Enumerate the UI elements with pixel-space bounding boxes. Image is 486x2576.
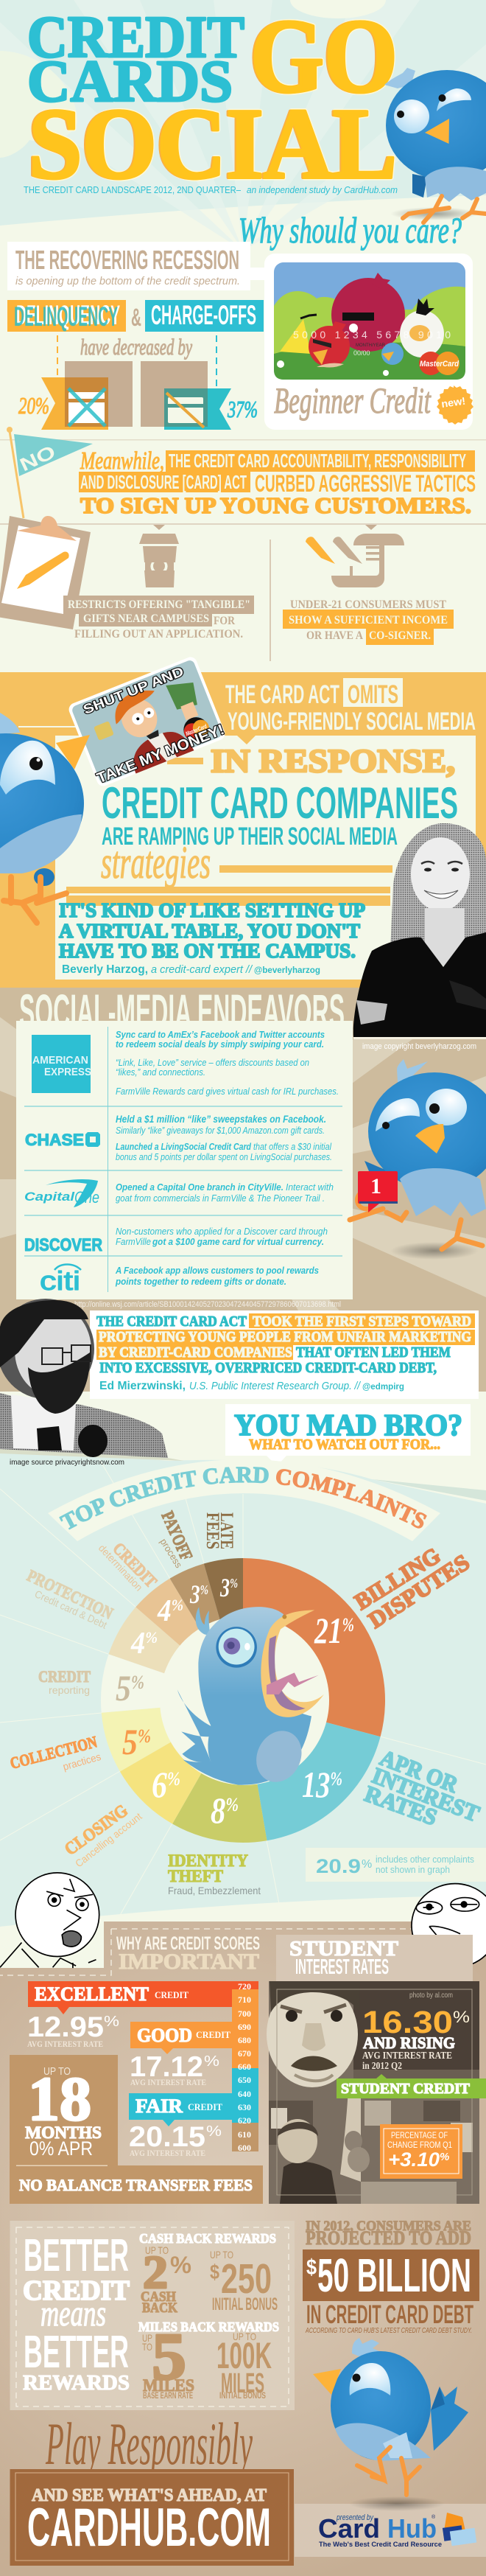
heading: why are credit scores important: WHY ARE CREDIT SCORES — [116, 1933, 260, 1954]
panel: cardhub call to action: AND SEE WHAT'S AHEAD, AT — [32, 2486, 267, 2505]
quote: beverly harzog: IT'S KIND OF LIKE SETTING UP — [59, 899, 365, 921]
label: delinquency: DELINQUENCY — [14, 301, 118, 332]
icon: blue bird with notification — [350, 1059, 486, 1260]
percent values: 6 — [152, 1764, 170, 1805]
title — [27, 0, 398, 200]
text: citi: A Facebook app allows customers to pool rewards — [115, 1265, 319, 1276]
block: fair credit — [129, 2093, 232, 2158]
divider with arrows — [0, 523, 486, 661]
card illustration: 00/00 — [353, 349, 370, 357]
chart: credit score scale: 690 — [238, 2022, 251, 2032]
subtitle: THE CREDIT CARD LANDSCAPE 2012, 2ND QUARTER– — [24, 184, 242, 195]
label: billing disputes: DISPUTES — [364, 1549, 474, 1633]
chart: credit score scale — [232, 1981, 258, 2153]
panel: 50 billion debt: $ — [306, 2255, 317, 2280]
text block: card act intro: AND DISCLOSURE [CARD] ACT — [80, 471, 247, 493]
header background with sky rays and clouds — [0, 0, 486, 251]
panel: student interest rates heading: INTEREST RATES — [295, 1955, 389, 1979]
percent values: 4 — [158, 1594, 173, 1628]
text: amex: “Link, Like, Love” service – offers discounts based on — [116, 1057, 309, 1068]
panel: Ed Mierzwinski quote: INTO EXCESSIVE, OVERPRICED CREDIT-CARD DEBT, — [99, 1360, 437, 1376]
stat: 16.30 percent — [362, 2005, 470, 2072]
miles back rewards: INITIAL BONUS — [219, 2390, 266, 2401]
text block: tangible gifts: FOR — [214, 615, 235, 627]
panel: student interest rates heading — [276, 1935, 473, 1981]
label: late fees — [202, 1512, 236, 1549]
have decreased by chart — [18, 334, 258, 430]
percent values: 3 — [220, 1573, 233, 1602]
text: amex: FarmVille Rewards card gives virtual cash for IRL purchases. — [116, 1086, 339, 1097]
divider — [0, 439, 486, 441]
text: photo credit: photo by al.com — [409, 1992, 453, 2000]
percent values: % — [225, 1794, 239, 1815]
label: credit reporting: CREDIT — [38, 1667, 91, 1686]
text block: tangible gifts: GIFTS NEAR CAMPUSES — [83, 612, 209, 625]
meme: y u no guy — [0, 1873, 99, 1968]
cash back rewards: $ — [210, 2261, 219, 2283]
icon: screaming twitter bird — [177, 1607, 324, 1790]
miles back rewards: UP TO — [233, 2331, 256, 2342]
block: fair credit: 20.15 — [129, 2121, 205, 2153]
cash back rewards: UP TO — [210, 2249, 233, 2261]
text: chase: Similarly “like” giveaways for $1,000 Amazon.com gift cards. — [116, 1125, 325, 1136]
chart: credit score scale: 680 — [238, 2035, 251, 2045]
panel: better credit means better rewards — [10, 2221, 295, 2410]
block: fair credit: AVG INTEREST RATE — [130, 2148, 205, 2158]
title: SOCIAL — [29, 88, 397, 200]
panel: presented by card hub — [295, 2504, 486, 2557]
cash back rewards: UP TO — [145, 2244, 169, 2256]
source url: http://online.wsj.com/article/SB10001424052702304724404577297860607013698.html — [74, 1300, 341, 1309]
stat: 16.30 percent: % — [453, 2008, 470, 2026]
heading: in response: IN RESPONSE, — [211, 743, 455, 779]
slogan — [23, 2230, 130, 2395]
slogan: BETTER — [24, 2230, 129, 2281]
subtitle: an independent study by CardHub.com — [247, 184, 398, 195]
panel: 50 billion debt — [303, 2219, 479, 2335]
pie ray lines — [0, 1459, 486, 1916]
note: 20.9 percent: not shown in graph — [376, 1864, 450, 1875]
callout: percentage of change: +3.10 — [388, 2149, 440, 2171]
photo: student angry face — [267, 1981, 479, 2204]
callout: percentage of change: PERCENTAGE OF — [391, 2130, 448, 2140]
label: student credit: STUDENT CREDIT — [341, 2081, 471, 2097]
block: excellent credit: % — [104, 2014, 119, 2030]
block: excellent credit — [27, 1981, 232, 2049]
chart: credit score scale: 670 — [238, 2048, 251, 2059]
panel: 18 months 0% apr: NO BALANCE TRANSFER FEES — [19, 2176, 253, 2194]
percent values: % — [138, 1725, 151, 1747]
miles back rewards: BASE EARN RATE — [143, 2390, 193, 2401]
text: discover — [116, 1226, 328, 1247]
stat: 16.30 percent: AND RISING — [363, 2034, 455, 2052]
percent values: % — [230, 1576, 238, 1591]
heading: card act omits: THE CARD ACT — [225, 680, 339, 709]
block: excellent credit: EXCELLENT — [35, 1983, 149, 2005]
text: citi: points together to redeem gifts or donate. — [115, 1276, 286, 1287]
label: identity theft: IDENTITY — [168, 1851, 248, 1870]
label: payoff process: PAYOFF — [158, 1509, 196, 1563]
icon: coffee cup — [139, 534, 179, 587]
band: social-media endeavors background with rays — [0, 988, 486, 1392]
cash back rewards: % — [170, 2252, 191, 2278]
logo: american express: AMERICAN — [32, 1054, 88, 1067]
panel: 18 months 0% apr: MONTHS — [25, 2123, 102, 2142]
label: late fees: LATE — [216, 1512, 236, 1549]
quote: beverly harzog: Beverly Harzog, — [62, 963, 148, 976]
heading: why are credit scores important — [116, 1933, 260, 1974]
crowd — [269, 2086, 473, 2204]
text: discover: got a $100 game card for virtual currency. — [152, 1236, 324, 1247]
callout: you mad bro — [225, 1404, 471, 1466]
percent values: 13 — [302, 1764, 339, 1805]
stat: 16.30 percent: AVG INTEREST RATE — [362, 2050, 452, 2062]
chart: credit score scale: 610 — [238, 2129, 251, 2140]
meme: challenge accepted guy — [412, 1884, 486, 1981]
panel: Ed Mierzwinski quote: Ed Mierzwinski, — [99, 1380, 186, 1392]
text: discover: FarmVille — [116, 1236, 151, 1247]
logo: american express: EXPRESS — [44, 1066, 91, 1078]
heading: card act omits: OMITS — [348, 680, 398, 709]
text: chase: Held a $1 million “like” sweepstakes on Facebook. — [116, 1113, 326, 1125]
label: protection: Credit card & Debt — [33, 1588, 109, 1631]
miles back rewards: 100K — [216, 2335, 272, 2376]
miles back rewards: MILES — [143, 2376, 194, 2395]
quote: beverly harzog: @beverlyharzog — [254, 965, 320, 975]
icon: NO flag: NO — [17, 441, 59, 475]
chart labels — [8, 1509, 483, 1896]
cash back rewards: INITIAL BONUS — [212, 2294, 278, 2314]
cash back rewards: CASH — [141, 2289, 176, 2305]
text: amex — [116, 1029, 339, 1097]
panel: presented by card hub: Hub — [387, 2513, 437, 2544]
icon: cards — [443, 2513, 476, 2546]
card illustration — [274, 262, 465, 380]
label: charge-offs — [145, 300, 264, 332]
cash back rewards: CASH BACK REWARDS — [139, 2231, 276, 2246]
text: chase: bonus and 5 points per dollar spent on LivingSocial purchases. — [116, 1152, 332, 1162]
label: closing: Cancelling account — [73, 1810, 144, 1869]
panel: recovering recession: THE RECOVERING RECESSION — [15, 245, 239, 275]
heading: why are credit scores important: IMPORTANT — [119, 1950, 259, 1974]
percent values: % — [131, 1672, 144, 1693]
quote: beverly harzog: a credit-card expert // — [151, 963, 253, 976]
title: SOCIAL — [29, 88, 397, 200]
block: excellent credit: 12.95 — [27, 2011, 104, 2043]
have decreased by chart: 37% — [227, 396, 258, 422]
label: identity theft — [168, 1851, 261, 1896]
percent values: % — [200, 1582, 208, 1597]
chart: credit score scale: 710 — [238, 1994, 251, 2005]
heading: card act omits — [225, 678, 476, 736]
text: capital one: Interact with — [286, 1181, 334, 1193]
image: take my money card — [67, 655, 227, 788]
slogan: means — [40, 2292, 106, 2334]
text: capital one — [116, 1181, 334, 1204]
quote: beverly harzog: HAVE TO BE ON THE CAMPUS. — [59, 940, 356, 962]
block: good credit: CREDIT — [196, 2029, 230, 2040]
note: 20.9 percent: includes other complaints — [376, 1854, 474, 1865]
badge: new — [437, 385, 473, 425]
icon: clipboard with pencil — [0, 516, 91, 629]
icon: header blue bird — [384, 68, 486, 223]
panel: presented by card hub: The Web's Best Credit Card Resource — [319, 2541, 442, 2549]
text block: card act intro — [79, 447, 476, 518]
panel: angry birds beginner credit card — [264, 254, 473, 430]
text: capital one: Opened a Capital One branch in CityVille. — [116, 1181, 284, 1193]
block: good credit: % — [204, 2053, 219, 2070]
label: protection: PROTECTION — [24, 1566, 116, 1623]
icon: NO flag — [7, 427, 93, 518]
logo: capital one — [24, 1179, 99, 1207]
title: GO — [249, 0, 396, 114]
panel: student interest rates heading: STUDENT — [289, 1938, 398, 1961]
panel: recovering recession: is opening up the bottom of the credit spectrum. — [15, 275, 240, 287]
panel: cardhub call to action: CARDHUB.COM — [27, 2498, 271, 2558]
title: CREDIT — [27, 5, 244, 70]
label: delinquency — [7, 300, 126, 332]
callout: percentage of change — [380, 2124, 462, 2179]
text: chase: Launched a LivingSocial Credit Card — [116, 1142, 251, 1152]
panel: 50 billion debt: IN 2012, CONSUMERS ARE — [306, 2219, 471, 2234]
label: charge-offs: CHARGE-OFFS — [151, 300, 256, 330]
block: fair credit: CREDIT — [188, 2101, 222, 2112]
percent values: 5 — [116, 1667, 134, 1708]
miles back rewards: MILES BACK REWARDS — [138, 2320, 279, 2334]
cash back rewards: BACK — [142, 2300, 177, 2316]
logo: discover: DISCOVER — [24, 1235, 102, 1255]
block: good credit: GOOD — [137, 2025, 192, 2046]
percent values: % — [172, 1596, 183, 1614]
panel: Ed Mierzwinski quote: THAT OFTEN LED THEM — [296, 1344, 451, 1361]
icon: blue bird with notification: 1 — [370, 1174, 381, 1198]
pie section background teal — [0, 1392, 486, 1927]
cash back rewards: 250 — [221, 2255, 272, 2303]
label: credit reporting: reporting — [49, 1684, 90, 1696]
note: 20.9 percent: % — [362, 1858, 372, 1871]
panel: Ed Mierzwinski quote: @edmpirg — [362, 1381, 404, 1392]
label: late fees: FEES — [202, 1512, 222, 1549]
slogan: REWARDS — [23, 2371, 130, 2395]
percent values: 5 — [122, 1721, 141, 1762]
percent values: % — [330, 1768, 342, 1790]
label: collection: practices — [61, 1751, 102, 1773]
miles back rewards: UP — [142, 2332, 152, 2344]
panel: recovering recession — [7, 242, 265, 290]
panel: cardhub call to action — [10, 2469, 294, 2566]
label: credit reporting — [38, 1667, 91, 1696]
percent values: % — [145, 1628, 158, 1647]
photo: beverly harzog — [353, 823, 486, 1039]
panel: 18 months 0% apr: UP TO — [43, 2065, 71, 2078]
text block: tangible gifts: FILLING OUT AN APPLICATION. — [74, 628, 243, 640]
percent values: % — [342, 1614, 354, 1636]
title: GO — [250, 0, 398, 114]
lower section tan background — [0, 1921, 486, 2576]
note: 20.9 percent — [306, 1848, 486, 1882]
callout: you mad bro: YOU MAD BRO? — [234, 1408, 462, 1442]
icon: left blue bird — [0, 713, 90, 923]
panel: 18 months 0% apr: 0% APR — [29, 2137, 93, 2160]
text block: card act intro: Meanwhile, — [80, 447, 164, 475]
title: CARDS — [27, 49, 233, 114]
title: SOCIAL — [27, 88, 395, 200]
text block: under-21 consumers: CO-SIGNER. — [369, 629, 431, 642]
panel: Ed Mierzwinski quote: U.S. Public Interest Research Group. // — [189, 1380, 362, 1392]
block: excellent credit: AVG INTEREST RATE — [27, 2039, 103, 2049]
miles back rewards: MILES — [221, 2368, 264, 2399]
label: identity theft: Fraud, Embezzlement — [168, 1885, 261, 1896]
have decreased by chart: 20% — [18, 392, 49, 419]
text block: under-21 consumers: SHOW A SUFFICIENT INCOME — [289, 614, 448, 626]
chart: credit score scale: 630 — [238, 2102, 251, 2112]
caption: image source: image source privacyrightsnow.com — [10, 1458, 124, 1467]
badge: new: new! — [440, 395, 466, 410]
callout: you mad bro: WHAT TO WATCH OUT FOR... — [249, 1437, 440, 1453]
heading: in response — [66, 743, 458, 906]
slogan: CREDIT — [23, 2275, 130, 2306]
band: orange social media section — [0, 672, 486, 988]
text block: under-21 consumers — [283, 598, 454, 645]
panel: endeavors table — [16, 1021, 353, 1299]
cash back rewards: 2 — [143, 2246, 168, 2298]
percent values: 4 — [131, 1627, 147, 1661]
text: citi — [115, 1265, 319, 1287]
percent values: 8 — [211, 1790, 229, 1831]
text block: card act intro: TO SIGN UP YOUNG CUSTOMERS. — [80, 492, 471, 518]
panel: 18 months 0% apr: 18 — [28, 2064, 91, 2134]
text: Play Responsibly — [46, 2410, 253, 2477]
percent values: % — [167, 1768, 180, 1790]
image: take my money card: SHUT UP AND — [81, 664, 186, 717]
label: apr or interest rates: RATES — [362, 1781, 440, 1830]
stat: 16.30 percent: in 2012 Q2 — [362, 2061, 402, 2072]
logo: chase: CHASE — [25, 1131, 84, 1149]
subtitle — [24, 184, 398, 195]
label: delinquency: DELINQUENCY — [16, 300, 120, 330]
label: apr or interest rates: INTEREST — [368, 1762, 483, 1826]
banner: top credit card complaints: TOP CREDIT CARD COMPLAINTS — [59, 1467, 427, 1530]
block: excellent credit: CREDIT — [155, 1989, 189, 2000]
logo: capital one: Capital — [24, 1190, 76, 1204]
block: good credit: AVG INTEREST RATE — [130, 2077, 206, 2087]
text block: tangible gifts — [63, 596, 254, 640]
quote: beverly harzog — [59, 899, 365, 976]
logo: american express — [32, 1035, 91, 1093]
label: collection: COLLECTION — [8, 1732, 99, 1773]
card illustration: MONTH/YEAR — [356, 343, 386, 348]
chart: complaints donut — [101, 1558, 385, 1843]
percent values — [116, 1573, 354, 1831]
chart: credit score scale: 650 — [238, 2075, 251, 2085]
label: payoff process: process — [158, 1537, 185, 1570]
label: identity theft: THEFT — [168, 1867, 223, 1885]
have decreased by chart: have decreased by — [80, 334, 192, 360]
image: take my money card: MasterCard — [185, 723, 208, 737]
panel: presented by card hub: ® — [432, 2514, 436, 2520]
logo: capital one: One — [74, 1188, 99, 1207]
panel: presented by card hub: Card — [318, 2513, 380, 2544]
panel: Ed Mierzwinski quote: THE CREDIT CARD ACT — [96, 1313, 247, 1330]
note: 20.9 percent: 20.9 — [316, 1855, 361, 1877]
stat: 16.30 percent: 16.30 — [362, 2005, 453, 2040]
percent values: 21 — [314, 1610, 351, 1651]
block: fair credit: % — [206, 2123, 222, 2140]
miles back rewards: TO — [142, 2341, 152, 2353]
block: fair credit: FAIR — [135, 2095, 183, 2117]
block: good credit — [130, 2022, 232, 2087]
chart: credit score scale: 660 — [238, 2062, 251, 2072]
panel: 18 months 0% apr — [10, 2055, 263, 2204]
block: good credit: 17.12 — [130, 2051, 203, 2083]
text: capital one: goat from commercials in FarmVille & The Pioneer Trail . — [116, 1193, 325, 1204]
photo: Ed Mierzwinski — [0, 1299, 168, 1458]
label: billing disputes: BILLING — [350, 1542, 445, 1615]
label: credit determination: determination — [96, 1542, 145, 1594]
panel: Ed Mierzwinski quote: BY CREDIT-CARD COMPANIES — [99, 1344, 292, 1361]
text block: under-21 consumers: OR HAVE A — [306, 629, 363, 642]
icon: pencil and scroll — [306, 534, 404, 587]
text block: under-21 consumers: UNDER-21 CONSUMERS MUST — [290, 598, 446, 611]
panel: Ed Mierzwinski quote — [90, 1310, 479, 1399]
callout: percentage of change: CHANGE FROM Q1 — [387, 2140, 452, 2150]
chart: credit score scale: 700 — [238, 2008, 251, 2019]
ampersand: & — [131, 304, 141, 332]
label: student credit — [337, 2074, 486, 2098]
cash back rewards — [139, 2231, 278, 2316]
text: chase — [116, 1113, 332, 1162]
chart: credit score scale: 640 — [238, 2089, 251, 2099]
label: apr or interest rates: APR OR — [376, 1745, 462, 1798]
image: take my money card: TAKE MY MONEY! — [95, 722, 227, 786]
heading: in response: strategies — [101, 838, 211, 888]
text block: tangible gifts: RESTRICTS OFFERING "TANGIBLE" — [68, 598, 250, 611]
icon: bottom blue bird — [313, 2338, 468, 2511]
chart: credit score scale: 620 — [238, 2115, 251, 2126]
card illustration: MasterCard — [420, 360, 459, 369]
label: credit determination: CREDIT — [109, 1539, 161, 1591]
text: discover: Non-customers who applied for a Discover card through — [116, 1226, 328, 1237]
chart: credit score scale: 720 — [238, 1981, 251, 1992]
miles back rewards — [138, 2320, 279, 2401]
card illustration: 5000 1234 5678 9010 — [293, 329, 451, 341]
percent values: 3 — [190, 1580, 203, 1609]
panel: presented by card hub: presented by — [336, 2513, 374, 2522]
quote: beverly harzog: A VIRTUAL TABLE, YOU DON'T — [59, 920, 360, 942]
callout: percentage of change: % — [440, 2151, 449, 2163]
text: amex: “likes,” and connections. — [116, 1067, 205, 1078]
title: GO — [250, 0, 398, 114]
miles back rewards: 5 — [152, 2320, 186, 2393]
text: amex: Sync card to AmEx’s Facebook and Twitter accounts — [116, 1029, 325, 1040]
logo: citi: citi — [40, 1266, 80, 1296]
slogan: BETTER — [24, 2327, 129, 2378]
text: amex: to redeem social deals by simply swiping your card. — [116, 1039, 324, 1050]
text: chase: that offers a $30 initial — [253, 1142, 332, 1152]
chart: credit score scale: 600 — [238, 2143, 251, 2153]
label: closing: CLOSING — [61, 1801, 132, 1860]
